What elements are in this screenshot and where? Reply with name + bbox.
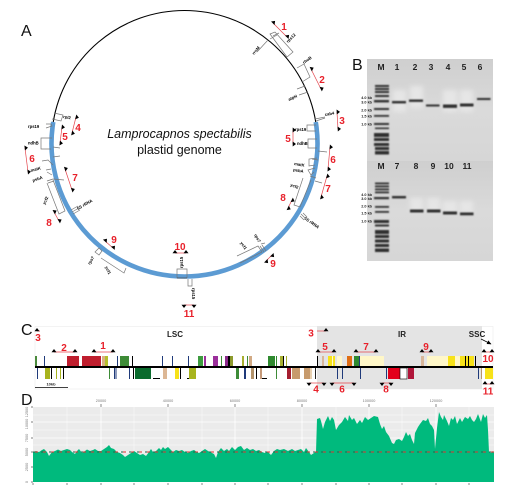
heading: A: A	[21, 23, 32, 40]
upper strand genes	[35, 356, 476, 366]
primer pair 5 right: 5	[285, 134, 291, 145]
primer pair 10: 10	[174, 242, 186, 253]
primer pair 6 right: 6	[330, 155, 336, 166]
gel 1 size labels: 2.0 kb	[361, 108, 373, 112]
mean coverage dashed line	[33, 451, 494, 453]
gel 1 lane labels	[377, 62, 483, 72]
gene labels: rps7	[87, 255, 96, 266]
linear primers lower	[309, 383, 492, 384]
gel 2 size labels	[361, 193, 373, 224]
genome circle: single copy black arc	[53, 11, 316, 122]
gene labels: rps19	[28, 124, 40, 129]
y axis labels: 10000	[25, 419, 29, 429]
primer pair 6 left	[25, 148, 35, 172]
linear primer numbers: 9	[423, 342, 429, 353]
scale bar	[35, 382, 68, 388]
y axis labels: 5000	[25, 448, 29, 456]
gel 2 lane labels: M	[377, 161, 385, 171]
primer pair 4	[72, 117, 81, 134]
primer pair 8 right: 8	[280, 193, 286, 204]
region labels: SSC	[469, 330, 485, 339]
gel 1 lane labels: 3	[429, 62, 434, 72]
panel C: linear genome map	[21, 322, 494, 398]
gene labels: cab4	[324, 110, 335, 117]
x axis labels: 40000	[163, 399, 173, 403]
panel B: agarose gels	[352, 57, 493, 261]
scale bar: 10kb	[46, 382, 56, 386]
linear primers upper	[37, 331, 492, 352]
gene boxes	[41, 32, 327, 286]
primer pair 5 left: 5	[62, 132, 68, 143]
gel 2 lane labels: 8	[414, 161, 419, 171]
gene labels: rps7	[253, 233, 262, 244]
gel 2 lane labels	[377, 161, 472, 171]
gel 2 lane labels: 9	[431, 161, 436, 171]
primer pair 9 right	[266, 255, 276, 270]
gel 1 lane labels: M	[377, 62, 385, 72]
region backgrounds	[35, 326, 493, 389]
primer pair 4: 4	[75, 123, 81, 134]
gel 1 lane labels: 2	[413, 62, 418, 72]
gel 2 lane labels: 7	[395, 161, 400, 171]
primer pair 8 left: 8	[46, 218, 52, 229]
gel 2 size labels: 4.0 kb	[361, 193, 373, 197]
gene labels: psbA	[293, 167, 304, 174]
gene labels: 5S rRNA	[76, 198, 93, 211]
gel 1 ladder and bands	[374, 85, 490, 154]
gene labels: rrnM	[251, 45, 261, 56]
gene labels: psbA	[32, 175, 43, 183]
gel 1 lane labels: 5	[462, 62, 467, 72]
y axis labels: 0	[25, 481, 29, 483]
grid lines	[33, 407, 494, 482]
primer pair 2: 2	[319, 75, 325, 86]
plot background	[33, 407, 494, 482]
gel 1 lane labels: 6	[478, 62, 483, 72]
axis ticks	[31, 404, 469, 485]
primer pair 6 right	[328, 147, 336, 169]
panel A: plastid genome map	[21, 11, 345, 320]
gel 1 size labels: 1.0 kb	[361, 122, 373, 126]
y axis labels: 2500	[25, 463, 29, 471]
primer pair 7 left	[65, 169, 78, 190]
x axis labels: 80000	[297, 399, 307, 403]
SSC arrow	[481, 339, 491, 344]
linear primer numbers: 1	[100, 341, 106, 352]
gene labels: rpl2	[63, 114, 72, 120]
gene labels: ycf1	[239, 241, 248, 251]
primer pair 8 left	[46, 212, 59, 229]
gel 1 lane labels: 4	[446, 62, 451, 72]
gel 2 lane labels: 10	[444, 161, 454, 171]
genome circle: duplicated blue arc	[52, 122, 317, 277]
gel 1 size labels	[361, 96, 373, 126]
genome title: Lamprocapnos spectabilis	[107, 127, 252, 141]
x axis labels: 100000	[363, 399, 375, 403]
region labels: IR	[398, 330, 406, 339]
linear primer numbers: 7	[363, 342, 369, 353]
region labels	[167, 330, 485, 339]
gene labels: 5S rRNA	[303, 216, 320, 230]
y axis labels: 12500	[25, 407, 29, 417]
x axis labels: 120000	[430, 399, 442, 403]
gene labels: rps19	[295, 127, 307, 132]
y axis labels: 7500	[25, 434, 29, 442]
gene labels: rps15	[191, 288, 196, 300]
linear primer numbers: 2	[61, 343, 67, 354]
gel 1 size labels: 3.0 kb	[361, 100, 373, 104]
gene labels: rps12	[285, 32, 297, 44]
genome subtitle: plastid genome	[137, 143, 222, 157]
gene labels: ndhB	[297, 141, 308, 146]
linear primer numbers: 6	[339, 384, 345, 396]
gene labels: matK	[30, 165, 41, 173]
gel 1 lane labels: 1	[395, 62, 400, 72]
y axis labels	[25, 407, 29, 483]
primer pair 9 right: 9	[270, 259, 276, 270]
linear primer numbers: 3	[308, 328, 314, 340]
x axis labels: 60000	[230, 399, 240, 403]
heading: D: D	[21, 392, 33, 409]
primer pair 9 left: 9	[111, 235, 117, 246]
gel 2 size labels: 2.0 kb	[361, 204, 373, 208]
primer pair 8 right	[280, 193, 292, 208]
primer pair 11: 11	[184, 309, 195, 320]
linear primer numbers: 8	[383, 384, 389, 396]
gene labels	[28, 32, 335, 300]
gel 2 size labels: 1.5 kb	[361, 212, 373, 216]
gel 1 smears	[393, 86, 473, 112]
gel 2 smears	[410, 198, 473, 213]
primer pair 3: 3	[339, 116, 345, 127]
coverage area	[33, 412, 494, 482]
linear primer numbers: 11	[483, 386, 494, 398]
genome axis line	[35, 366, 493, 368]
gel 1 size labels: 4.0 kb	[361, 96, 373, 100]
heading: C: C	[21, 322, 33, 339]
gel 1	[361, 59, 493, 161]
primer pair 5 right	[285, 130, 293, 145]
primer pair 5 left	[60, 127, 68, 143]
primer pair 9 left	[105, 235, 117, 248]
linear primer numbers: 3	[35, 333, 41, 344]
primer pair 3	[337, 112, 345, 129]
linear primer numbers: 5	[322, 342, 328, 353]
x axis labels: 20000	[96, 399, 106, 403]
linear primer numbers: 4	[313, 384, 319, 396]
primer pair 1	[273, 22, 287, 37]
gene labels: rps15	[179, 256, 184, 268]
gene labels: ycf1	[104, 265, 112, 276]
gene labels: atpH	[287, 93, 298, 102]
gel 2 ladder and bands	[374, 182, 474, 252]
primer pair 7 left: 7	[72, 173, 78, 184]
gene labels: rhoB	[302, 55, 313, 65]
heading: B: B	[352, 57, 363, 74]
gel 2 size labels: 1.0 kb	[361, 220, 373, 224]
gel 1 size labels: 1.5 kb	[361, 114, 373, 118]
gene labels: ndhB	[28, 140, 39, 146]
linear primer numbers: 10	[482, 354, 494, 365]
primer pair 2	[311, 69, 325, 89]
region labels: LSC	[167, 330, 183, 339]
gel 2	[361, 161, 493, 261]
primer pair 6 left: 6	[29, 154, 35, 165]
primer pair 7 right: 7	[325, 184, 331, 195]
gene labels: ycf2	[290, 182, 300, 190]
gel 2 lane labels: 11	[462, 161, 472, 171]
panel D: coverage plot	[21, 392, 494, 485]
gene labels: ycf2	[41, 195, 50, 205]
linear primer numbers	[35, 328, 494, 398]
x axis labels	[96, 399, 442, 403]
primer pair 7 right	[321, 176, 331, 197]
gene labels: matK	[294, 161, 305, 168]
primer pair 1: 1	[281, 22, 287, 33]
lower strand genes	[37, 368, 493, 379]
gel 2 size labels: 3.0 kb	[361, 197, 373, 201]
